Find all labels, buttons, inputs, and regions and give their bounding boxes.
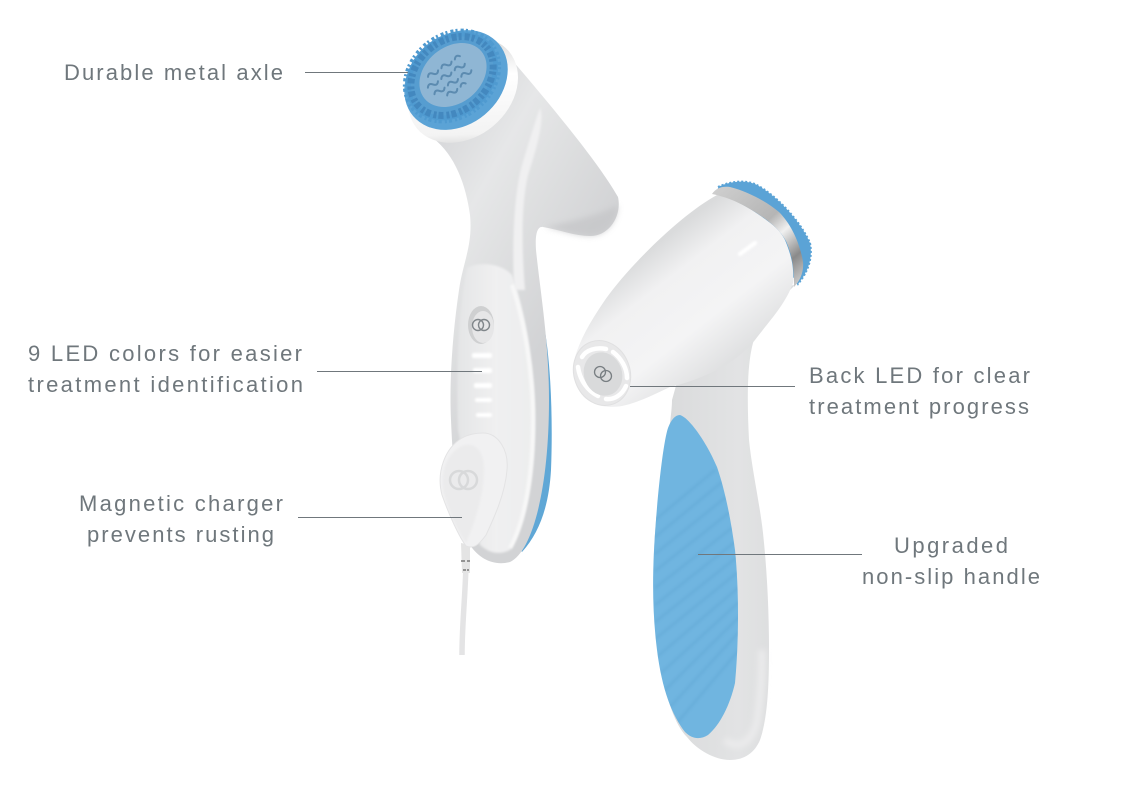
brush head [384,10,528,150]
icon: logo [472,320,490,330]
handle [653,285,795,760]
callout: LED colors: 9 LED colors for easier [28,341,302,366]
panel edge stripes [510,285,533,548]
blue brush edge [718,182,811,284]
central wave pad [407,30,499,120]
blue side of handle [515,320,552,552]
neck highlight stripe [513,108,541,290]
blue grip [653,415,739,738]
LED indicator bars [472,353,492,417]
callout: LED colors [28,341,482,397]
callout: magnetic charger [79,491,462,547]
callout: back LED: treatment progress [809,394,1029,419]
charger inner plate [443,445,484,543]
metal band [712,187,803,287]
callout: magnetic charger: prevents rusting [87,522,274,547]
head body [574,195,793,407]
handle bottom highlight [725,650,762,745]
magnetic charger [440,433,507,547]
brush ring [387,15,539,165]
callout: non-slip handle: non-slip handle [862,564,1040,589]
callout: back LED: Back LED for clear [809,363,1030,388]
center button [578,347,628,401]
power button [468,306,494,344]
handle and arm body [433,60,619,563]
callout: durable metal axle: Durable metal axle [64,60,283,85]
callout: magnetic charger: Magnetic charger [79,491,283,516]
callout: LED colors: treatment identification [28,372,303,397]
cable [461,543,470,655]
bristle ring [388,13,516,139]
device: front view with charger [384,10,619,655]
callout: non-slip handle: Upgraded [894,533,1008,558]
LED ring segments [578,348,627,399]
device: back view with blue grip [564,182,811,760]
brush rim [384,10,528,150]
back LED end cap [564,332,640,414]
front handle panel [457,264,535,553]
callout: non-slip handle [698,533,1040,589]
arm shading [545,205,618,236]
callout: back LED [630,363,1030,419]
gloss mark [740,243,755,254]
grip ribs [656,512,738,723]
icon: logo [594,366,612,382]
icon: charger logo [450,471,477,489]
